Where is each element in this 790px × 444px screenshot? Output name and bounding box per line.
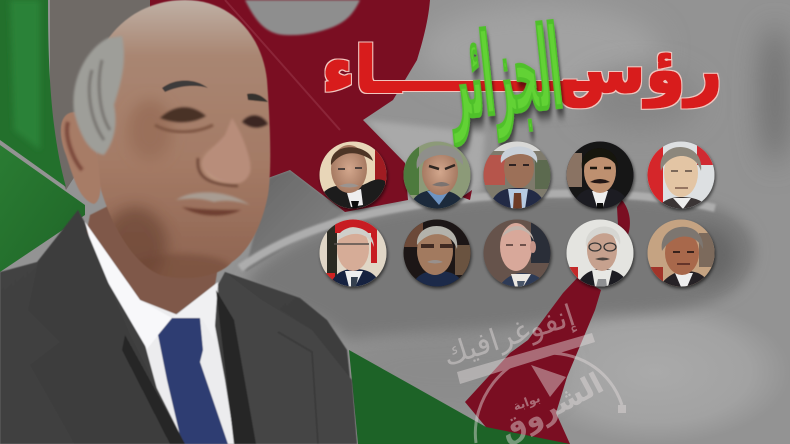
mouth [182, 207, 241, 216]
title: green calligraphy word: الجزائر [441, 2, 568, 146]
coat [0, 210, 357, 444]
face shading [111, 100, 228, 278]
watermark text: infographic: إنفوغرافيك [439, 298, 579, 374]
portrait: row 2, person 3 [483, 219, 551, 287]
portrait: row 1, person 1 [319, 141, 387, 209]
eyebrows [162, 80, 208, 92]
portrait: row 2, person 2 [403, 219, 471, 287]
watermark text: portal: بوابة [511, 391, 542, 415]
portrait: row 2, person 1 [319, 219, 387, 287]
coat pocket flap [278, 332, 318, 444]
title: red word [322, 34, 722, 108]
watermark ring [475, 353, 622, 443]
portrait: row 2, person 4 [566, 219, 634, 287]
neck [85, 200, 220, 315]
portrait: row 1, person 3 [483, 141, 551, 209]
tie [158, 318, 228, 444]
hair [73, 36, 124, 155]
portrait: row 1, person 5 [647, 141, 715, 209]
watermark ring end [618, 405, 626, 413]
eyes [160, 107, 206, 122]
flag: red crescent [80, 0, 630, 444]
ear [61, 112, 101, 204]
watermark icon: pencil [457, 333, 595, 384]
moustache [176, 192, 250, 205]
main figure: president portrait [0, 0, 357, 444]
portrait: row 2, person 5 [647, 219, 715, 287]
head [90, 0, 270, 278]
coat right side [218, 272, 357, 444]
title: red word: رؤس [557, 34, 722, 108]
watermark icon: arrow tip [531, 365, 566, 397]
watermark: Chorouk portal logo [439, 298, 626, 444]
portrait: row 1, person 4 [566, 141, 634, 209]
portrait: row 1, person 2 [403, 141, 471, 209]
coat left lapel [28, 210, 185, 444]
nose [202, 118, 250, 184]
dark fold [245, 194, 755, 340]
title: red word: ـاء [322, 34, 402, 108]
shirt [85, 222, 235, 444]
flag: green field [0, 0, 570, 444]
